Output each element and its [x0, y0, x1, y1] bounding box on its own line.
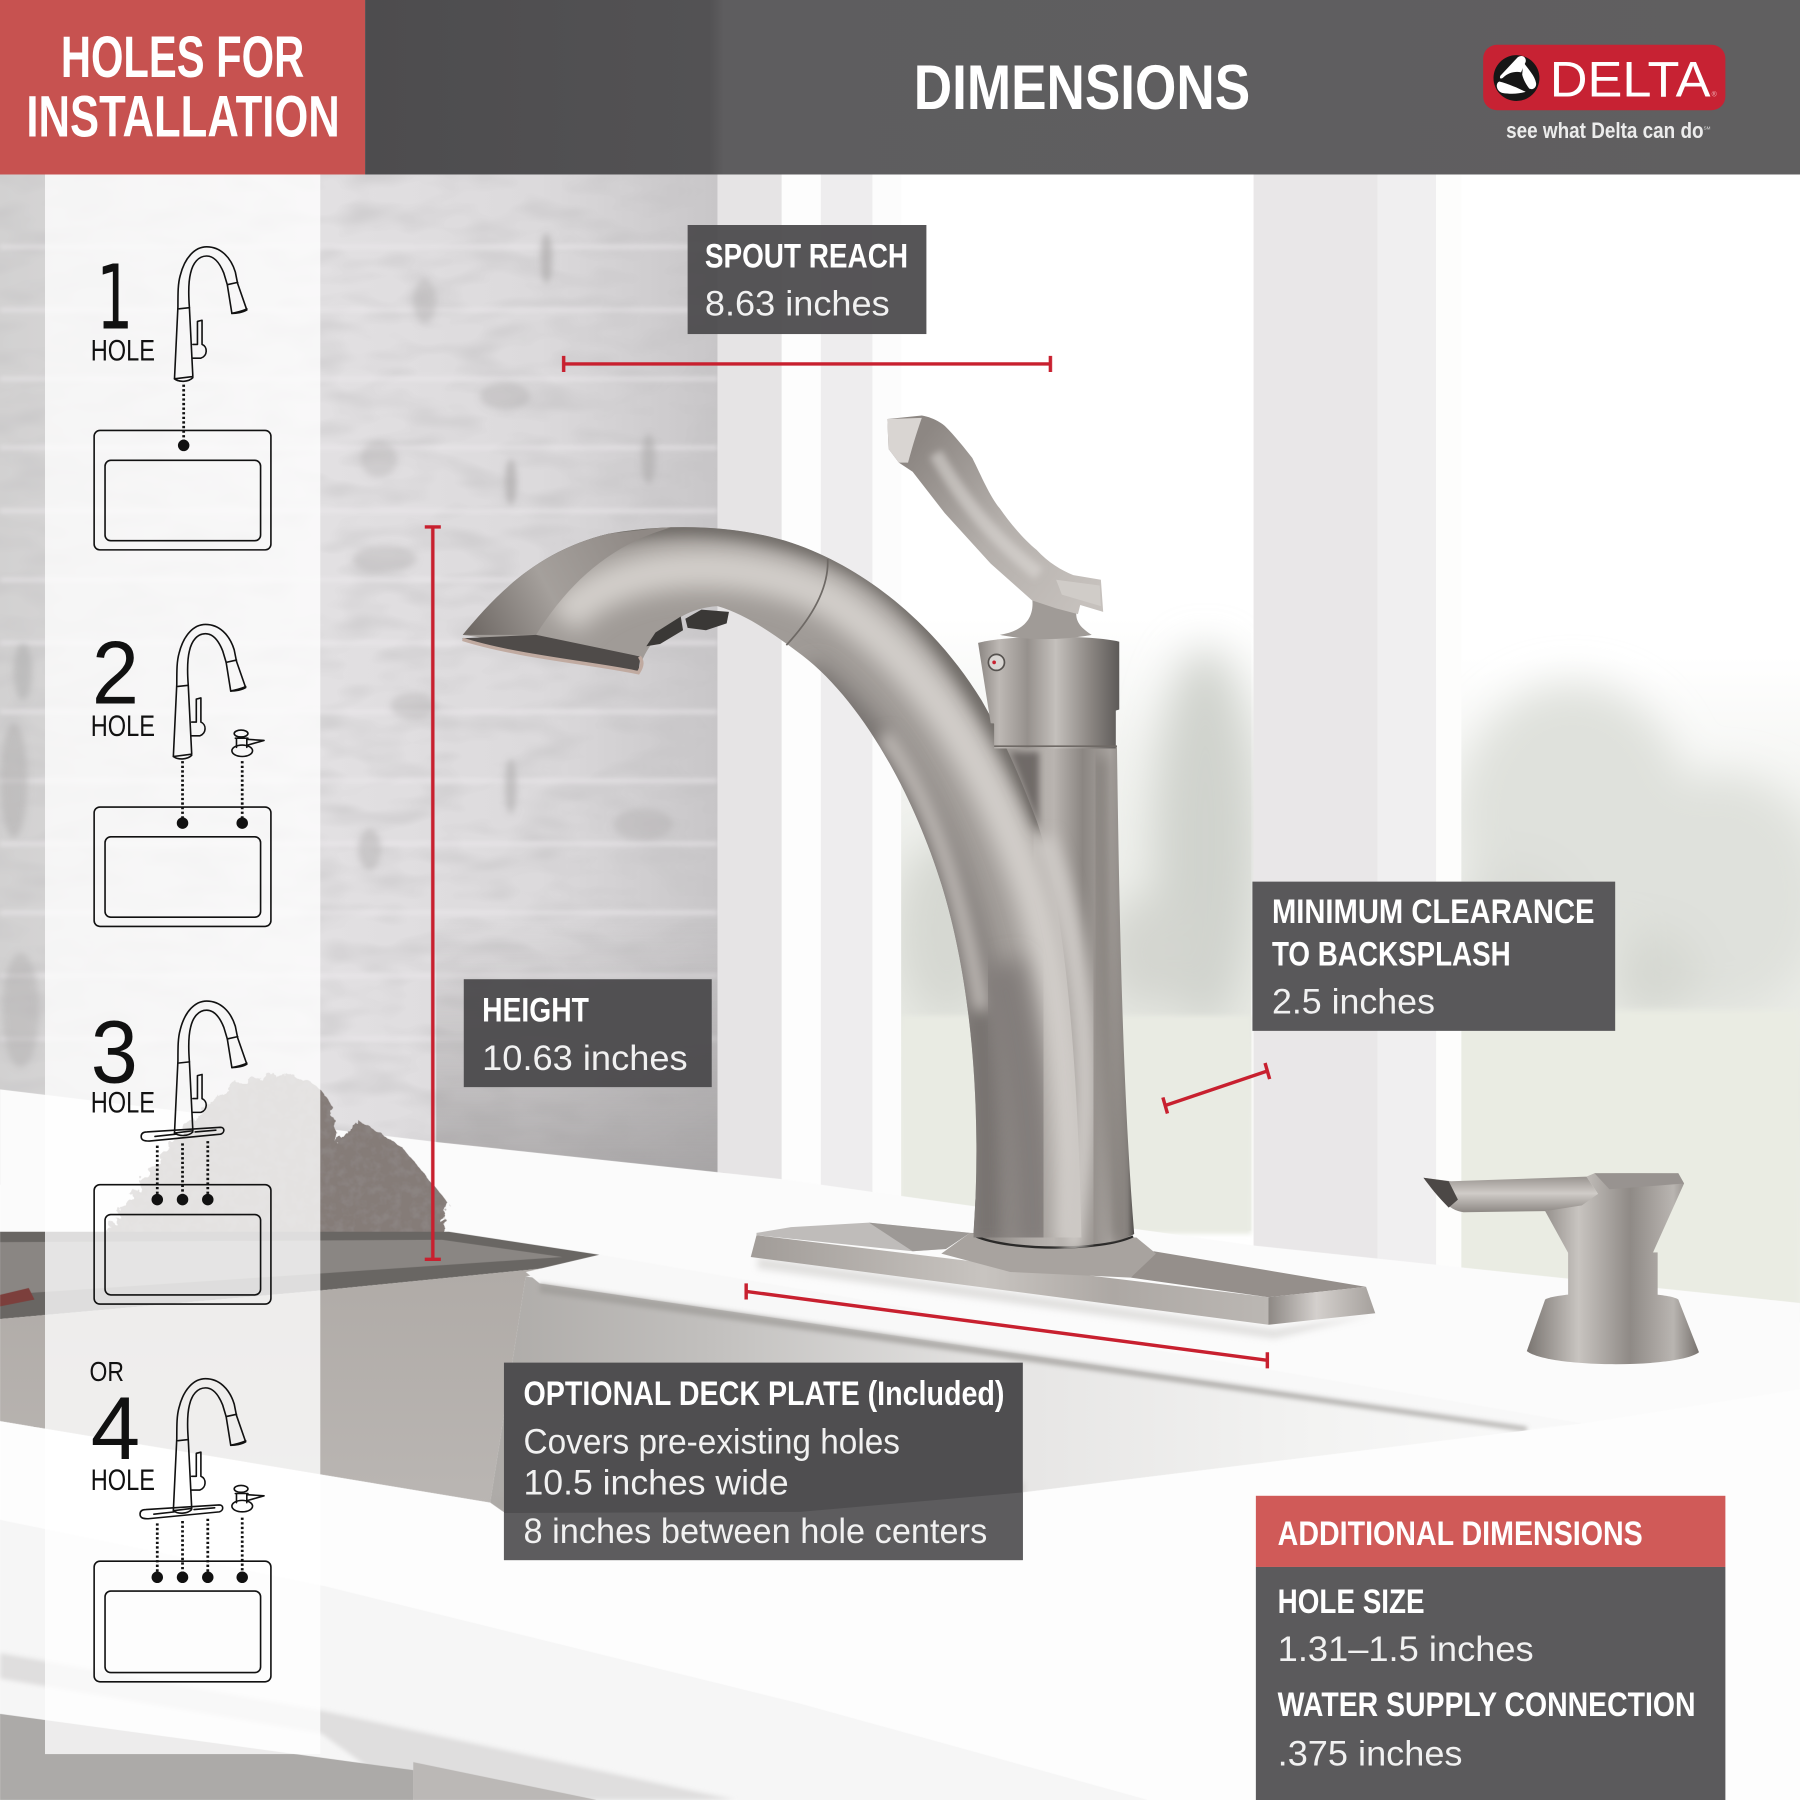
window frame [717, 174, 782, 1208]
logo: Delta: see what Delta can do [1506, 118, 1704, 143]
icon group: 3 hole: 3 [91, 1002, 138, 1102]
spout buttons [646, 610, 729, 646]
trees outside the window [895, 649, 1800, 1027]
dispenser nozzle [1423, 1177, 1598, 1212]
callout: optional deck plate: OPTIONAL DECK PLATE (Included) [523, 1375, 1004, 1413]
icon group: 2 hole: 2 [92, 623, 139, 723]
spray head face [463, 635, 641, 673]
brick wall [0, 174, 717, 1185]
icon group: or 4 hole: 4 [91, 1378, 140, 1478]
spray head seam [786, 559, 828, 645]
callout: height: 10.63 inches [482, 1038, 688, 1078]
counter front shadows [0, 1520, 1148, 1800]
icon group: 3 hole [91, 1001, 271, 1304]
icon group: 1 hole: 1 [96, 246, 133, 350]
counter lip [526, 1255, 1582, 1428]
cabinet below [0, 1714, 413, 1800]
deck plate [751, 1223, 1375, 1325]
callout: spout reach: 8.63 inches [705, 284, 890, 324]
logo: Delta: SM [1704, 126, 1711, 131]
column [973, 746, 1134, 1249]
icon group: 1 hole: HOLE [91, 334, 155, 367]
icon group: 2 hole: HOLE [91, 710, 155, 743]
panel: additional dimensions [1256, 1496, 1725, 1800]
heading panel: holes for installation: HOLES FOR [61, 25, 304, 90]
window left [0, 174, 1800, 1322]
faucet [459, 416, 1375, 1339]
callout: minimum clearance: 2.5 inches [1272, 982, 1435, 1022]
panel heading [1256, 1496, 1725, 1567]
header bar [365, 0, 1800, 174]
logo: Delta: DELTA [1550, 50, 1711, 107]
dispenser base [1527, 1293, 1699, 1364]
lever handle [887, 416, 1103, 614]
callout: optional deck plate: Covers pre-existing holes [523, 1421, 900, 1461]
logo: Delta [1483, 45, 1725, 143]
logo: Delta: ® [1712, 90, 1717, 98]
icon: deck plate dimension line [746, 1283, 1267, 1368]
callout: spout reach [688, 225, 926, 334]
dispenser neck [1568, 1252, 1658, 1298]
sink rim [0, 1232, 599, 1319]
soap dispenser [1423, 1173, 1699, 1364]
heading: dimensions: DIMENSIONS [914, 53, 1250, 123]
sink interior [0, 1263, 599, 1503]
heading panel: holes for installation [0, 0, 365, 174]
counter back section [0, 1089, 1800, 1800]
dispenser body [1545, 1173, 1684, 1259]
heading panel: holes for installation: INSTALLATION [26, 85, 340, 150]
icon: clearance dimension line [1163, 1063, 1270, 1114]
icon group: or 4 hole: HOLE [91, 1464, 155, 1497]
callout: optional deck plate [504, 1363, 1023, 1560]
spout and column blend highlights [1010, 752, 1119, 1251]
soft base shadow [758, 1257, 1374, 1339]
icon group: or 4 hole: OR [90, 1356, 124, 1387]
handle stem [1000, 597, 1092, 639]
panel body: .375 inches [1278, 1734, 1462, 1774]
panel body [1256, 1567, 1725, 1800]
panel: holes for installation background [45, 174, 320, 1754]
panel body: 1.31–1.5 inches [1278, 1629, 1534, 1669]
callout: minimum clearance: MINIMUM CLEARANCE [1272, 893, 1595, 931]
counter front [0, 1389, 1800, 1800]
panel heading: ADDITIONAL DIMENSIONS [1278, 1515, 1643, 1553]
icon group: 3 hole: HOLE [91, 1086, 155, 1119]
icon group: or 4 hole [90, 1356, 271, 1682]
icon: spout reach dimension line [564, 356, 1050, 372]
callout: height [464, 979, 712, 1087]
spout [459, 517, 1102, 1251]
icon group: 2 hole [91, 623, 271, 926]
callout: height: HEIGHT [482, 992, 589, 1030]
icon group: 1 hole [91, 246, 271, 550]
kale [69, 1075, 449, 1291]
callout: minimum clearance [1252, 882, 1615, 1031]
callout: spout reach: SPOUT REACH [705, 237, 908, 275]
icon: height dimension line [425, 527, 441, 1259]
callout: minimum clearance: TO BACKSPLASH [1272, 935, 1511, 973]
panel body: HOLE SIZE [1278, 1583, 1425, 1621]
panel body: WATER SUPPLY CONNECTION [1278, 1686, 1696, 1724]
callout: optional deck plate: 8 inches between hole centers [523, 1511, 987, 1551]
neck and collar [994, 700, 1116, 748]
callout: optional deck plate: 10.5 inches wide [523, 1463, 789, 1503]
